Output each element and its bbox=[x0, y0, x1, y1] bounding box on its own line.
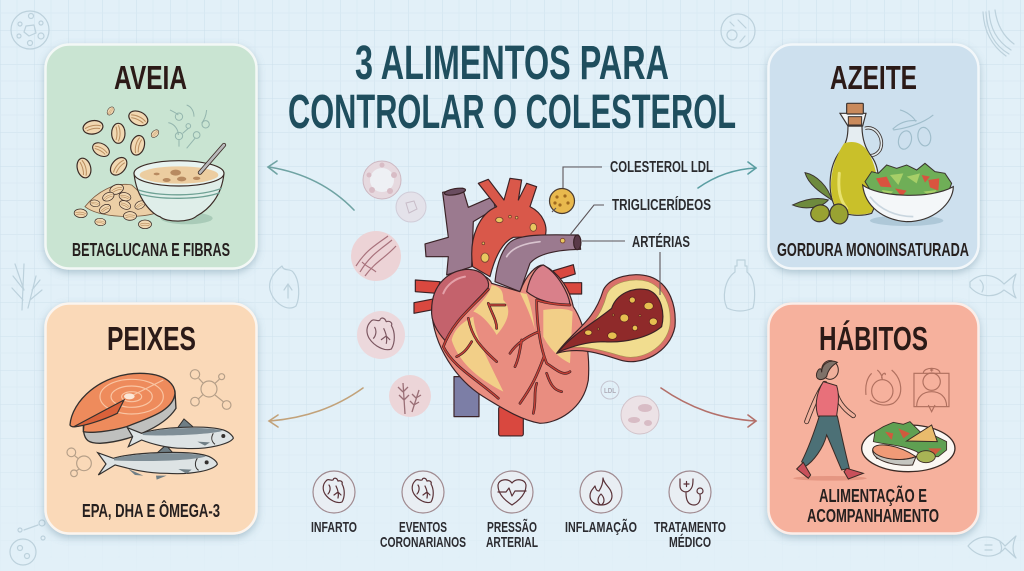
illustration: salmon and sardines bbox=[67, 370, 233, 480]
callout: colesterol ldl bbox=[552, 159, 713, 212]
heading: aveia: AVEIA bbox=[114, 59, 187, 96]
heading: peixes: PEIXES bbox=[107, 320, 196, 357]
arrow: to habitos bbox=[661, 388, 756, 427]
bottom row: pressao arterial: ARTERIAL bbox=[486, 534, 538, 551]
title: CONTROLAR O COLESTEROL bbox=[288, 86, 736, 139]
panel: aveia bbox=[46, 44, 256, 268]
arrow: to aveia bbox=[268, 161, 354, 210]
ldl particle bbox=[550, 188, 574, 214]
heading: azeite: AZEITE bbox=[830, 59, 917, 96]
bottom row: tratamento medico: MÉDICO bbox=[669, 534, 711, 551]
side icons: risk circles: LDL bbox=[604, 388, 617, 395]
heart body bbox=[432, 265, 589, 423]
callout: arterias bbox=[582, 234, 690, 295]
bottom row: infarto: INFARTO bbox=[311, 519, 357, 536]
panel: peixes bbox=[46, 304, 256, 534]
illustration: walking woman, icons and plate bbox=[793, 361, 955, 481]
panel: habitos bbox=[768, 304, 978, 534]
illustration: oats and bowl bbox=[74, 105, 224, 229]
heart illustration bbox=[414, 178, 675, 436]
bottom row: eventos coronarianos: EVENTOS bbox=[399, 519, 447, 536]
bottom row: inflamacao: INFLAMAÇÃO bbox=[565, 518, 637, 536]
callout: triglicerideos bbox=[570, 197, 711, 235]
callout: colesterol ldl: COLESTEROL LDL bbox=[610, 159, 713, 176]
illustration: olive oil and salad bbox=[793, 103, 953, 226]
subtitle: aveia: BETAGLUCANA E FIBRAS bbox=[72, 240, 230, 260]
subtitle: habitos bbox=[807, 485, 939, 526]
bottom row: infarto bbox=[311, 471, 357, 536]
callout: triglicerideos: TRIGLICERÍDEOS bbox=[612, 197, 711, 214]
bottom row: eventos coronarianos: CORONARIANOS bbox=[380, 534, 466, 551]
subtitle: habitos: ALIMENTAÇÃO E bbox=[819, 485, 927, 506]
bottom row: pressao arterial: PRESSÃO bbox=[487, 518, 537, 536]
bottom row: pressao arterial bbox=[486, 471, 538, 551]
heading: habitos: HÁBITOS bbox=[819, 320, 928, 357]
subtitle: peixes: EPA, DHA E ÔMEGA-3 bbox=[82, 500, 220, 521]
plaque cross-section bbox=[557, 275, 675, 362]
arrow: to peixes bbox=[269, 388, 363, 427]
bottom row: tratamento medico: TRATAMENTO bbox=[654, 519, 726, 536]
vessels bbox=[414, 178, 582, 436]
callout: arterias: ARTÉRIAS bbox=[632, 234, 690, 251]
title bbox=[288, 37, 736, 139]
bottom row: inflamacao bbox=[565, 471, 637, 536]
title: 3 ALIMENTOS PARA bbox=[355, 37, 669, 90]
bottom row: eventos coronarianos bbox=[380, 471, 466, 551]
arrow: to azeite bbox=[698, 162, 756, 188]
side icons: risk circles bbox=[351, 161, 659, 434]
bottom row: tratamento medico bbox=[654, 471, 726, 551]
subtitle: habitos: ACOMPANHAMENTO bbox=[807, 506, 939, 526]
panel: azeite bbox=[768, 44, 978, 268]
